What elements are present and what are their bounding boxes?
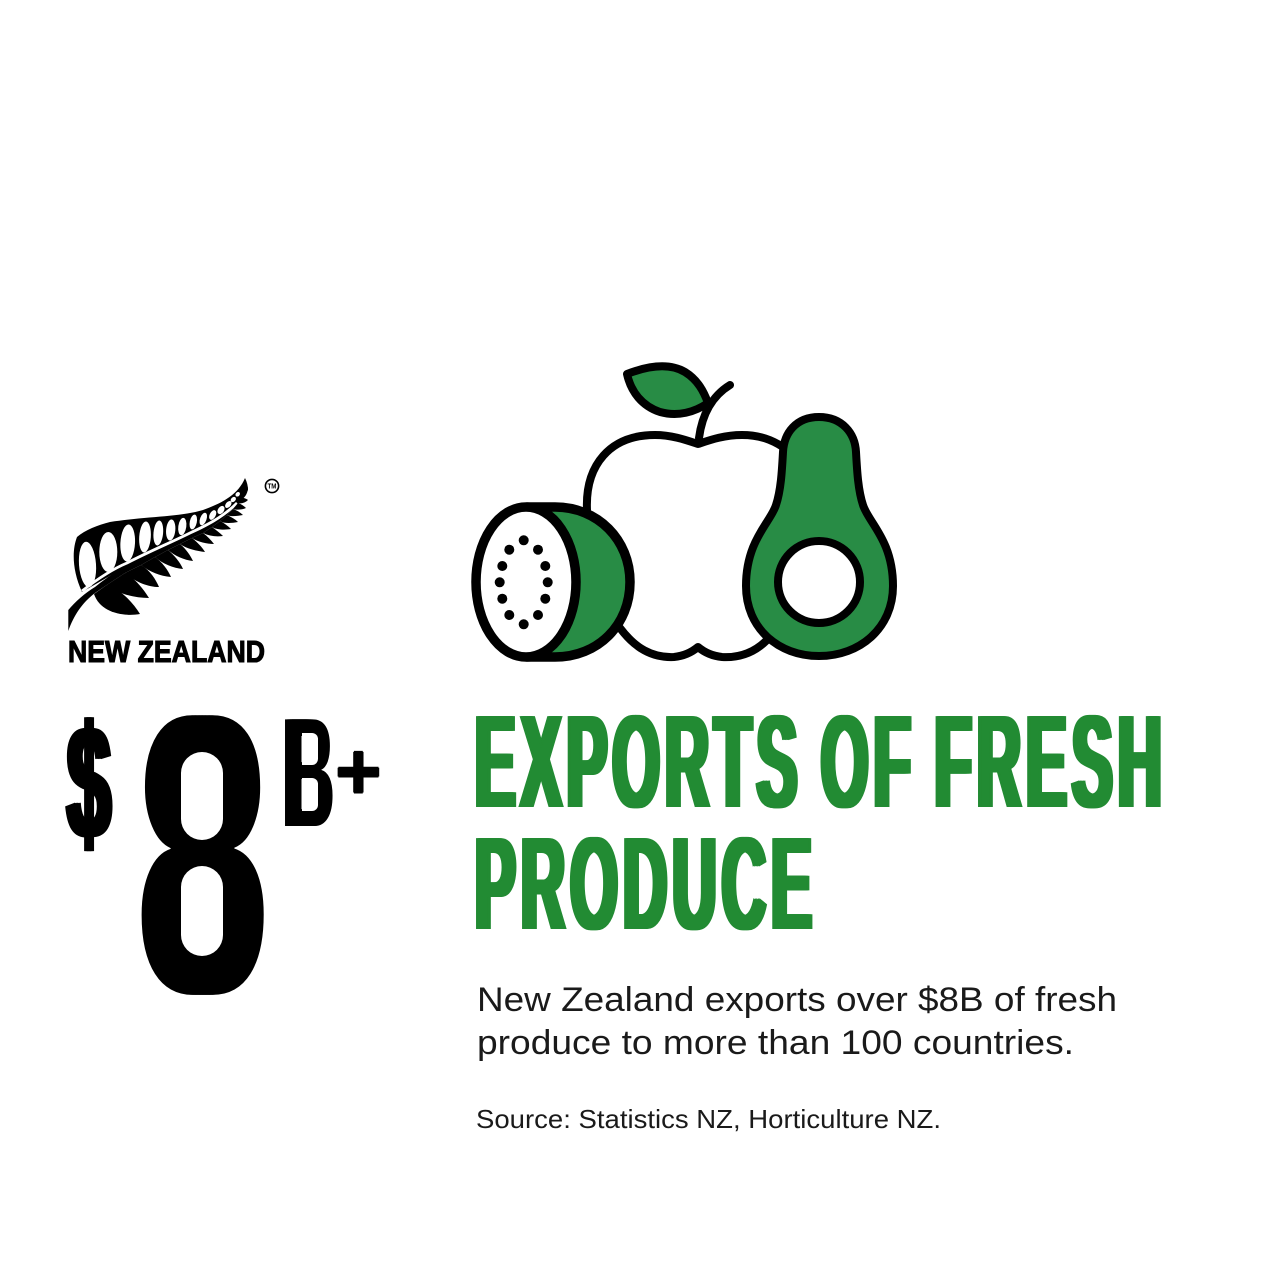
kiwi flesh — [476, 507, 576, 657]
dollar sign: $ — [67, 691, 111, 874]
logo wordmark: NEW ZEALAND — [68, 635, 265, 669]
icon: trademark symbol: TM — [268, 484, 277, 491]
heading: exports of fresh produce — [474, 688, 1167, 957]
heading line 2: PRODUCE — [474, 810, 817, 957]
source note: Source: Statistics NZ, Horticulture NZ. — [476, 1104, 941, 1134]
icon: trademark symbol — [265, 479, 279, 493]
kiwi skin — [527, 507, 630, 657]
apple leaf — [627, 366, 708, 414]
description line 1: New Zealand exports over $8B of fresh — [477, 981, 1117, 1019]
letter B: B — [284, 686, 332, 859]
avocado pit — [778, 541, 860, 623]
heading line 1: EXPORTS OF FRESH — [474, 688, 1167, 835]
icon: fern — [68, 478, 248, 631]
icon: apple — [587, 366, 783, 657]
icon: avocado half — [746, 417, 893, 656]
numeral 8: 8 — [145, 633, 260, 1075]
plus sign: + — [335, 727, 382, 816]
big number: $8B+ — [65, 633, 382, 1075]
icon: kiwifruit half — [476, 507, 630, 657]
apple stem — [699, 385, 730, 438]
kiwi seeds — [495, 535, 553, 629]
description line 2: produce to more than 100 countries. — [477, 1024, 1074, 1062]
